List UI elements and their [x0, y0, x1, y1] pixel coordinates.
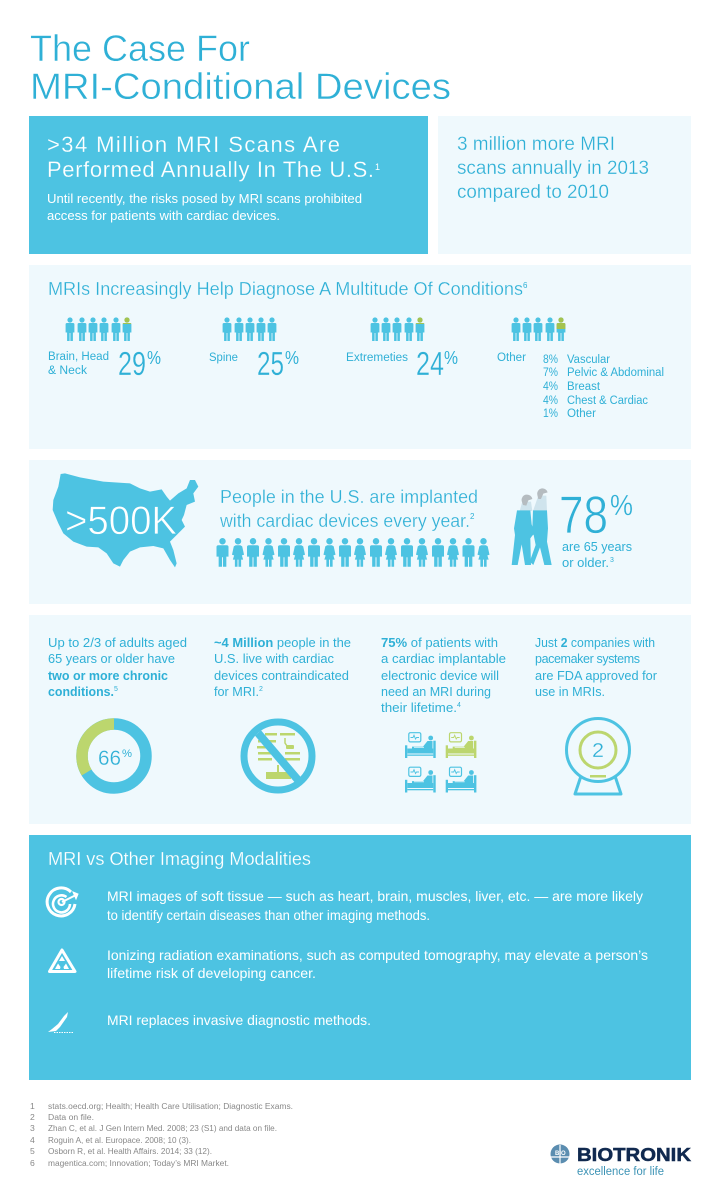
fact: contraindicated devices [214, 636, 351, 699]
icon: MRI machine: 2 [592, 740, 604, 762]
fact: patients needing MRI: a cardiac implantable [381, 652, 506, 666]
fact: patients needing MRI: need an MRI during [381, 685, 491, 699]
logo: Biotronik: BIOTRONIK [577, 1145, 691, 1165]
icon: radiation warning [50, 950, 75, 972]
text: soft tissue: to identify certain diseases than other imaging methods. [107, 907, 430, 923]
footnotes: 3 [30, 1123, 35, 1133]
stat: 78%: are 65 years [562, 540, 632, 554]
title: MRI-Conditional Devices [30, 66, 451, 107]
stat: extremeties 24%: Extremeties [346, 352, 408, 364]
panel description: Until recently, the risks posed by MRI scans prohibited [47, 192, 362, 206]
section heading: MRIs Increasingly Help Diagnose A Multitude Of Conditions [48, 279, 523, 299]
pictogram: six people [66, 317, 131, 341]
fact: FDA approved companies: are FDA approved for [535, 669, 657, 683]
stat: other breakdown: 4% [543, 395, 558, 407]
fact: FDA approved companies [535, 636, 657, 699]
callout text [457, 134, 649, 203]
fact: patients needing MRI: 4 [457, 702, 461, 709]
stat: other breakdown: Vascular [567, 354, 610, 366]
stat: spine 25%: Spine [209, 352, 238, 364]
stat: other breakdown: Chest & Cardiac [567, 395, 648, 407]
panel: conditions diagnosed [29, 265, 691, 449]
pictogram: row of people [216, 538, 490, 567]
donut chart: 66% [82, 724, 146, 788]
panel heading: >34 Million MRI Scans Are [47, 132, 340, 157]
stat: 78% [559, 486, 633, 570]
pictogram: five people [371, 317, 424, 341]
fact: chronic conditions: 5 [114, 686, 118, 693]
fact: chronic conditions: Up to 2/3 of adults aged [48, 636, 187, 650]
text: ionizing radiation: lifetime risk of developing cancer. [107, 965, 316, 981]
stat: spine 25%: 25 [257, 345, 284, 382]
stat: extremeties 24%: 24 [416, 345, 444, 382]
stat: 78%: 78 [559, 486, 608, 545]
stat: other breakdown: 1% [543, 408, 558, 420]
icon: target [47, 888, 78, 916]
footnotes: stats.oecd.org; Health; Health Care Utilisation; Diagnostic Exams. [48, 1101, 293, 1111]
text: soft tissue: MRI images of soft tissue — such as heart, brain, muscles, liver, etc. — are more likely [107, 888, 643, 904]
stat: brain, head and neck 29%: & Neck [48, 365, 87, 377]
fact: contraindicated devices: ~4 Million people in the [214, 636, 351, 650]
panel description: access for patients with cardiac devices. [47, 209, 280, 223]
panel heading: Performed Annually In The U.S. [47, 157, 374, 182]
panel heading [47, 132, 380, 182]
fact: chronic conditions: two or more chronic [48, 669, 168, 683]
panel: MRI vs other imaging [29, 835, 691, 1080]
fact: FDA approved companies: Just 2 companies with [535, 636, 655, 650]
section heading: MRI vs Other Imaging Modalities [48, 849, 311, 869]
icon: prohibited device [244, 722, 312, 790]
footnotes: 2 [30, 1112, 35, 1122]
logo: Biotronik: excellence for life [577, 1166, 664, 1178]
implanted statement [219, 487, 478, 531]
fact: contraindicated devices: for MRI. [214, 685, 259, 699]
footnotes: 1 [30, 1101, 35, 1111]
stat: brain, head and neck 29%: Brain, Head [48, 351, 109, 363]
panel: implanted patients [29, 460, 691, 604]
fact: contraindicated devices: 2 [259, 686, 263, 693]
footnotes: 6 [30, 1158, 35, 1168]
fact: patients needing MRI: electronic device will [381, 669, 499, 683]
panel: 3 million more scans [438, 116, 691, 254]
fact: patients needing MRI [381, 636, 506, 715]
panel: four facts [29, 615, 691, 824]
footnotes: 4 [30, 1135, 35, 1145]
implanted statement: People in the U.S. are implanted [220, 487, 478, 507]
section heading: 6 [523, 281, 528, 290]
panel description [47, 192, 362, 223]
footnotes: Osborn R, et al. Health Affairs. 2014; 33 (12). [48, 1146, 212, 1156]
stat: other breakdown: 7% [543, 367, 558, 379]
pictogram: five people [223, 317, 276, 341]
icon: MRI machine [566, 718, 630, 794]
icon: scalpel [48, 1012, 73, 1032]
stat: 78%: or older. [562, 556, 609, 570]
footnotes: Roguin A, et al. Europace. 2008; 10 (3). [48, 1135, 191, 1145]
stat: brain, head and neck 29%: 29 [118, 345, 146, 382]
footnotes: Data on file. [48, 1112, 94, 1122]
stat: extremeties 24% [346, 317, 458, 375]
donut chart: 66%: 66 [98, 747, 121, 770]
US map with 500K: >500K [65, 499, 177, 543]
fact: chronic conditions: conditions. [48, 685, 114, 699]
stat: brain, head and neck 29%: % [147, 348, 161, 368]
fact: patients needing MRI: 75% of patients with [381, 636, 498, 650]
stat: other breakdown: 8% [543, 354, 558, 366]
stat: other breakdown: Breast [567, 381, 601, 393]
footnotes: magentica.com; Innovation; Today’s MRI Market. [48, 1158, 229, 1168]
icon: four hospital beds [405, 733, 476, 792]
panel heading: 1 [375, 162, 380, 172]
donut chart: 66%: % [122, 748, 132, 760]
icon: logo globe [550, 1144, 570, 1164]
stat: brain, head and neck 29% [48, 317, 161, 382]
US map with 500K [53, 473, 198, 567]
stat: 78%: 3 [610, 557, 614, 564]
stat: other breakdown [497, 317, 664, 420]
stat: other breakdown: Pelvic & Abdominal [567, 367, 664, 379]
implanted statement: with cardiac devices every year. [219, 511, 470, 531]
icon: logo globe: BIO [555, 1151, 566, 1157]
pictogram: five people [512, 317, 565, 341]
fact: FDA approved companies: use in MRIs. [535, 685, 605, 699]
logo: Biotronik [550, 1144, 691, 1178]
stat: spine 25%: % [285, 348, 299, 368]
callout text: compared to 2010 [457, 182, 609, 203]
footnotes: Zhan C, et al. J Gen Intern Med. 2008; 23 (S1) and data on file. [48, 1123, 277, 1133]
stat: other breakdown: Other [497, 352, 526, 364]
stat: spine 25% [209, 317, 299, 382]
fact: contraindicated devices: devices contraindicated [214, 669, 349, 683]
panel: MRI scans annually [29, 116, 428, 254]
fact: patients needing MRI: their lifetime. [381, 701, 457, 715]
text: invasive methods: MRI replaces invasive diagnostic methods. [107, 1012, 371, 1028]
title [30, 28, 451, 107]
implanted statement: 2 [470, 512, 475, 521]
text: soft tissue [107, 888, 643, 923]
fact: chronic conditions: 65 years or older have [48, 652, 175, 666]
fact: chronic conditions [48, 636, 187, 699]
fact: FDA approved companies: pacemaker systems [535, 652, 640, 666]
stat: 78%: % [610, 490, 633, 522]
text: ionizing radiation [107, 947, 648, 981]
stat: other breakdown: Other [567, 408, 596, 420]
callout text: 3 million more MRI [457, 134, 615, 155]
footnotes: 5 [30, 1146, 35, 1156]
fact: contraindicated devices: U.S. live with cardiac [214, 652, 334, 666]
text: ionizing radiation: Ionizing radiation examinations, such as computed tomography, may elevate a person’s [107, 947, 648, 963]
stat: extremeties 24%: % [444, 348, 458, 368]
title: The Case For [30, 28, 250, 69]
footnotes [30, 1101, 293, 1168]
stat: other breakdown: 4% [543, 381, 558, 393]
callout text: scans annually in 2013 [457, 158, 649, 179]
icon: elderly couple walking [512, 488, 552, 565]
